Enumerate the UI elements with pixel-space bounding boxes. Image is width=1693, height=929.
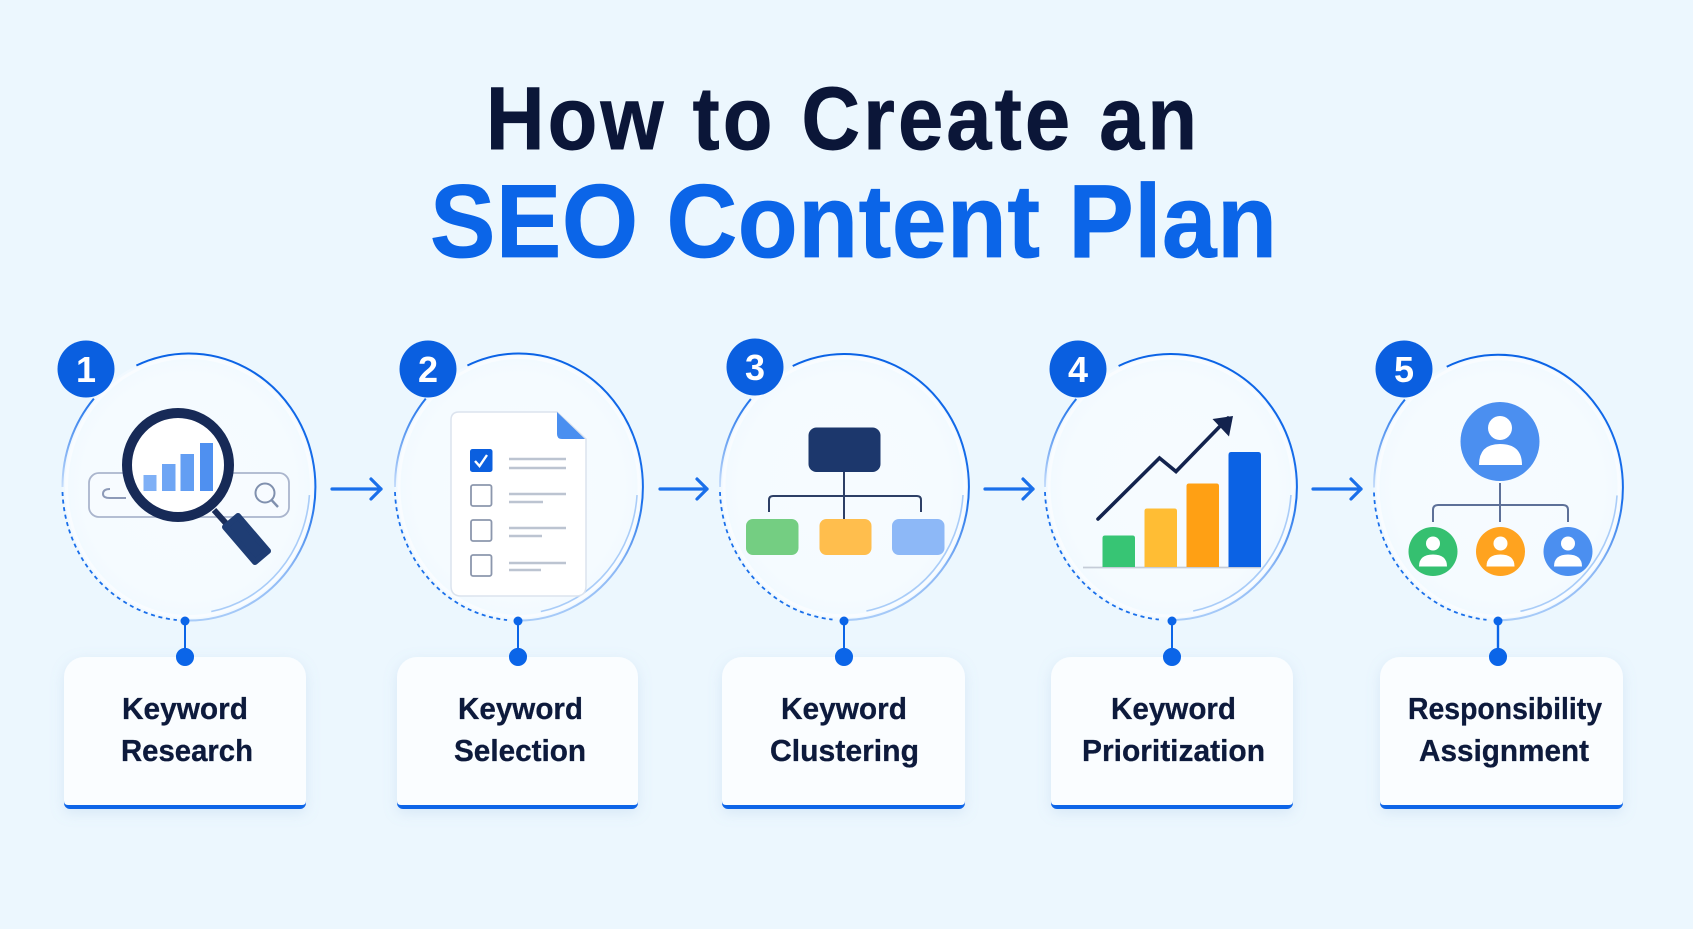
arrow 3 to 4	[985, 479, 1033, 499]
badge 4: 4	[1068, 349, 1088, 390]
connector 3	[835, 616, 853, 666]
ring 4	[1045, 354, 1297, 620]
icon: growth bar chart	[1083, 416, 1261, 568]
label: keyword prioritization: Keyword	[1111, 691, 1236, 726]
badge 2	[400, 340, 456, 398]
icon: magnifying glass over search bar	[89, 413, 289, 562]
card 3	[722, 648, 965, 809]
label: responsibility assignment	[1408, 691, 1603, 768]
card 5	[1380, 648, 1623, 809]
ring 3	[720, 354, 969, 620]
card 2	[397, 648, 638, 809]
step 5: responsibility assignment	[1374, 340, 1623, 666]
card 1	[64, 648, 306, 809]
ring 1	[62, 353, 316, 621]
label: keyword clustering: Clustering	[770, 733, 919, 768]
connector 5	[1489, 616, 1507, 666]
label: keyword selection	[454, 691, 586, 768]
badge 5: 5	[1394, 349, 1414, 390]
title line 2: SEO Content Plan	[430, 164, 1277, 280]
card 4	[1051, 648, 1293, 809]
label: responsibility assignment: Assignment	[1419, 733, 1589, 768]
arrow 1 to 2	[332, 479, 381, 499]
badge 1: 1	[76, 349, 96, 390]
label: keyword research	[121, 691, 253, 768]
title	[430, 69, 1277, 280]
step 4: keyword prioritization	[1045, 340, 1297, 666]
icon: team org chart	[1408, 402, 1592, 576]
connector 4	[1163, 616, 1181, 666]
badge 2: 2	[418, 349, 438, 390]
connector 1	[176, 616, 194, 666]
label: keyword research: Research	[121, 733, 253, 768]
label: keyword prioritization	[1082, 691, 1265, 768]
step 2: keyword selection	[395, 340, 643, 666]
title line 1: How to Create an	[486, 69, 1197, 169]
arrow 4 to 5	[1313, 479, 1361, 499]
badge 3	[726, 338, 784, 396]
label: responsibility assignment: Responsibility	[1408, 691, 1603, 726]
label: keyword clustering: Keyword	[781, 691, 907, 726]
label: keyword research: Keyword	[122, 691, 248, 726]
ring 2	[395, 353, 643, 621]
ring 5	[1374, 355, 1623, 620]
step 1: keyword research	[58, 340, 316, 666]
connector 2	[509, 616, 527, 666]
badge 3: 3	[745, 347, 765, 388]
badge 4	[1050, 340, 1106, 398]
label: keyword prioritization: Prioritization	[1082, 733, 1265, 768]
label: keyword selection: Selection	[454, 733, 586, 768]
step 3: keyword clustering	[720, 338, 969, 666]
arrow 2 to 3	[660, 479, 707, 499]
icon: checklist document	[451, 412, 586, 596]
badge 1	[58, 340, 114, 398]
label: keyword selection: Keyword	[458, 691, 583, 726]
icon: cluster hierarchy	[746, 428, 944, 555]
badge 5	[1376, 340, 1432, 398]
label: keyword clustering	[770, 691, 919, 768]
